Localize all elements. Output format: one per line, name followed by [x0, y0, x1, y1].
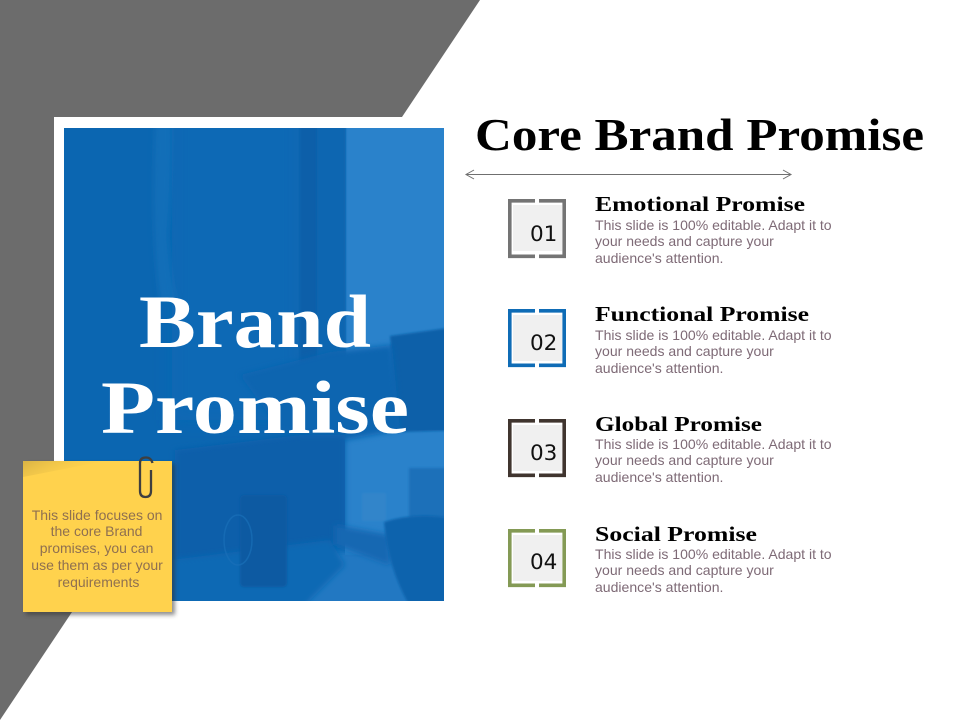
heading: Social Promise: [595, 522, 757, 546]
description: your needs and capture your: [595, 233, 774, 249]
item 3: Global Promise: [510, 412, 836, 485]
note text: This slide focuses on: [32, 507, 162, 523]
description: This slide is 100% editable. Adapt it to: [595, 436, 832, 452]
heading: Emotional Promise: [595, 192, 805, 216]
number badge 03: [510, 421, 564, 475]
description: your needs and capture your: [595, 562, 774, 578]
number badge 03: 03: [530, 441, 557, 466]
description: your needs and capture your: [595, 452, 774, 468]
heading: Global Promise: [595, 412, 762, 436]
heading: Brand Promise: Brand: [139, 281, 371, 364]
panel: brand promise photo card: Promise: [101, 367, 409, 450]
background diagonal grey shape: [0, 0, 480, 720]
panel: yellow sticky note: [23, 458, 175, 615]
description: This slide is 100% editable. Adapt it to: [595, 546, 832, 562]
note text: the core Brand: [51, 523, 142, 539]
description: audience's attention.: [595, 579, 723, 595]
white photo frame: [54, 117, 444, 601]
number badge 02: [510, 311, 564, 365]
note text: requirements: [58, 574, 139, 590]
description: audience's attention.: [595, 250, 723, 266]
note paper: [23, 461, 172, 612]
arrow: double-headed divider: [466, 170, 791, 179]
blue tinted photo: [64, 128, 444, 601]
item 1: Emotional Promise: [510, 192, 836, 266]
description: audience's attention.: [595, 360, 723, 376]
icon: paperclip: [140, 458, 152, 497]
panel: brand promise photo card: [54, 117, 444, 601]
number badge 01: 01: [530, 222, 557, 247]
note text: use them as per your: [31, 557, 163, 573]
number badge 04: 04: [530, 550, 557, 575]
note text: promises, you can: [40, 540, 153, 556]
description: This slide is 100% editable. Adapt it to: [595, 327, 832, 343]
item 2: Functional Promise: [510, 302, 836, 376]
number badge 04: [510, 531, 564, 585]
note shadow: [26, 464, 175, 615]
description: audience's attention.: [595, 469, 723, 485]
description: This slide is 100% editable. Adapt it to: [595, 217, 832, 233]
number badge 01: [510, 201, 564, 256]
number badge 02: 02: [530, 331, 557, 356]
item 4: Social Promise: [510, 522, 836, 595]
title: Core Brand Promise: [475, 110, 924, 160]
heading: Functional Promise: [595, 302, 809, 326]
description: your needs and capture your: [595, 343, 774, 359]
